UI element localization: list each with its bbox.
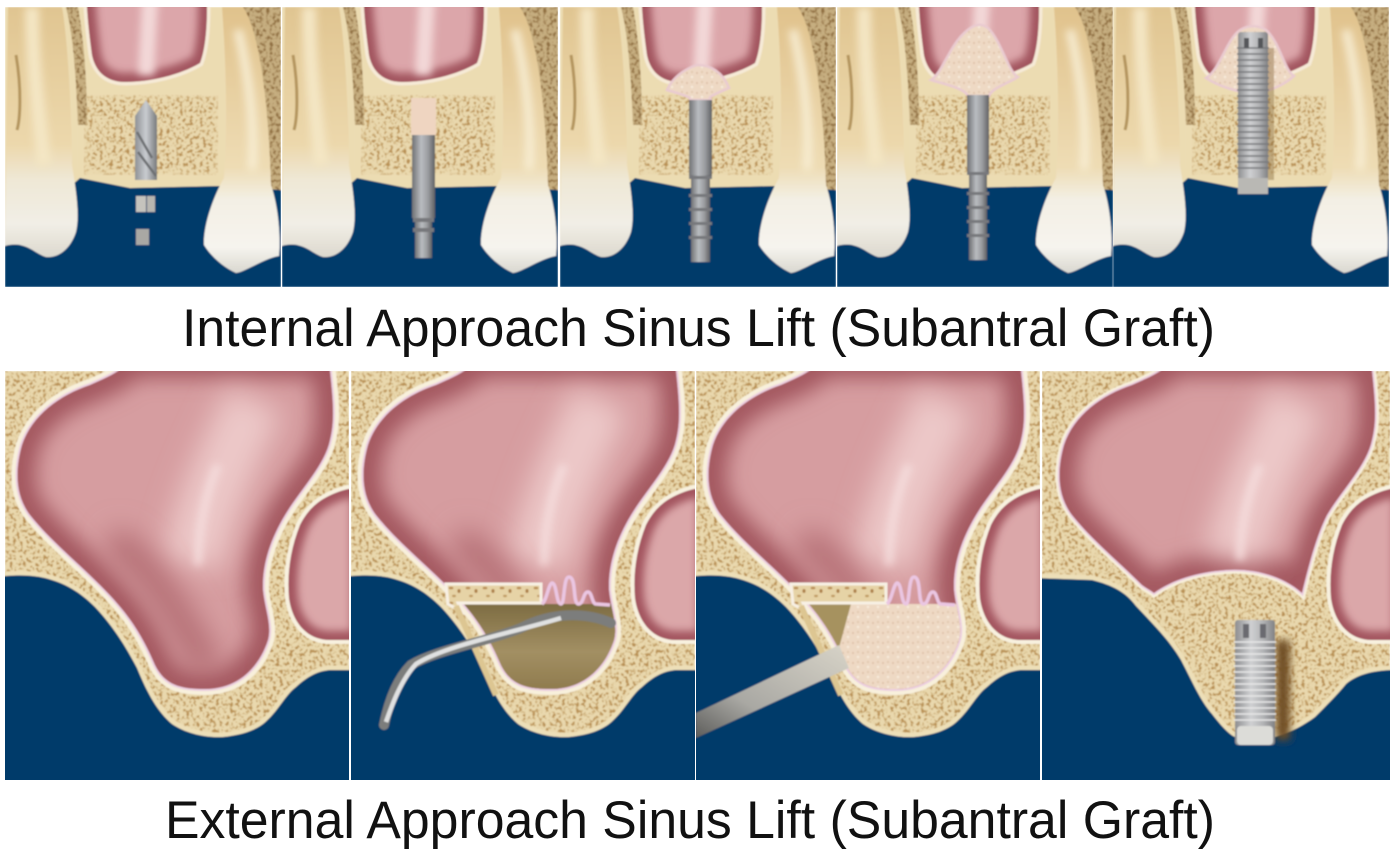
panel: external approach step 4, implant in healed graft (1037, 360, 1400, 790)
panel: internal approach step 4, large membrane lift (837, 0, 1113, 287)
cavity under lifted membrane (464, 603, 616, 689)
panel: internal approach step 3, small membrane lift (560, 0, 836, 287)
bone window flap (446, 584, 541, 612)
panel: external approach step 2, membrane elevation (351, 371, 695, 780)
icon: osteotome (967, 95, 989, 260)
icon: graft syringe (696, 645, 849, 738)
graft plug (411, 98, 436, 135)
panel: internal approach step 2, graft and osteotome (282, 0, 558, 287)
graft dome (667, 65, 729, 100)
heading: internal approach: Internal Approach Sinus Lift (Subantral Graft) (182, 299, 1215, 358)
graft material (810, 603, 961, 690)
heading: external approach: External Approach Sinus Lift (Subantral Graft) (165, 791, 1215, 850)
wavy membrane (542, 577, 610, 605)
icon: osteotome (689, 100, 712, 262)
graft dome (931, 25, 1018, 96)
panel: external approach step 3, graft placement (696, 371, 1040, 780)
icon: osteotome (412, 135, 435, 258)
graft dome (1206, 26, 1294, 93)
icon: twist drill and fragments (135, 100, 157, 245)
icon: curette instrument (384, 615, 611, 725)
icon: threaded implant (1237, 32, 1274, 194)
wavy membrane (887, 577, 955, 605)
bone window flap (791, 584, 886, 612)
panel: internal approach step 5, implant placed (1113, 0, 1389, 287)
panel: external approach step 1, intact sinus (0, 360, 360, 790)
icon: threaded implant (1234, 620, 1290, 745)
panel: internal approach step 1, pilot drill (5, 0, 281, 287)
